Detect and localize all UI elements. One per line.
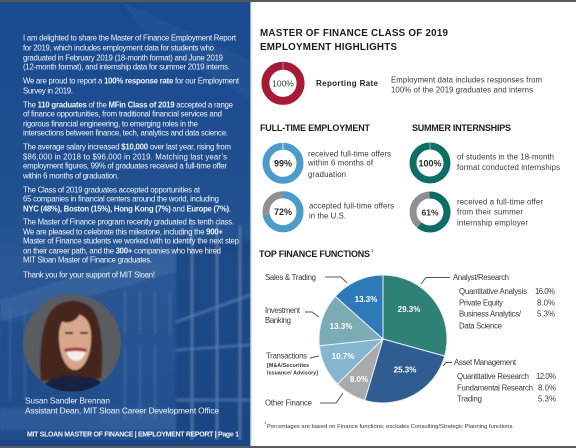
text block: letter paragraphs: graduated in February 2019 (18-month format) and June 2019 [23,53,223,62]
label: Analyst/Research breakdown: 8.0% [537,299,555,308]
title: EMPLOYMENT HIGHLIGHTS [260,42,397,53]
text block: footer: MIT SLOAN MASTER OF FINANCE | EMPLOYMENT REPORT | Page 1 [27,432,239,438]
text block: letter paragraphs: intersections between finance, tech, analytics and data science. [23,129,228,138]
leader lines: pie callouts [305,277,452,403]
icon: 99% donut [266,143,300,180]
text block: reporting rate description: 100% of the 2019 graduates and interns [391,86,533,95]
text block: letter paragraphs: Thank you for your support of MIT Sloan! [23,271,155,280]
text block: letter paragraphs [22,34,240,280]
icon: 61% donut [413,195,447,229]
text block: 100% description [457,153,560,172]
title [260,28,449,53]
heading: full-time employment: FULL-TIME EMPLOYMENT [260,123,370,133]
icon: reporting rate donut [265,62,301,101]
footnote [264,420,514,430]
text block: letter paragraphs: $86,000 in 2018 to $96,000 in 2019. Matching last year’s [23,153,227,162]
text block: signature: Assistant Dean, MIT Sloan Career Development Office [25,406,219,416]
label: Asset Management breakdown: 8.0% [538,384,556,393]
label: Asset Management breakdown: Quantitative Research [457,372,529,381]
icon: portrait of Susan Sandler Brennan [23,294,121,392]
label: Analyst/Research breakdown: Quantitative Analysis [459,287,527,296]
text block: letter paragraphs: We are pleased to celebrate this milestone, including the 900+ [23,227,223,236]
text block: 61% description: internship employer [457,219,528,228]
text block: letter paragraphs: MIT Sloan Master of Finance graduates. [23,256,152,265]
text block: 61% description [457,198,543,228]
panel: blue letter sidebar [0,0,250,448]
text block: 99% description: received full-time offers [308,149,391,158]
text block: 72% description: accepted full-time offers [309,202,394,211]
text block: letter paragraphs: NYC (48%), Boston (15%), Hong Kong (7%) and Europe (7%). [23,205,231,214]
label: Asset Management breakdown: Trading [457,395,482,404]
icon: reporting rate donut: 100% [272,78,294,88]
label: Sales & Trading: Sales & Trading [265,273,316,282]
icon: 100% donut: 100% [418,158,442,168]
chart labels: pie percentages: 29.3% [398,305,420,314]
text block: 72% description [309,202,394,221]
heading: summer internships: SUMMER INTERNSHIPS [412,123,511,133]
label: Asset Management breakdown: 5.3% [538,395,556,404]
label: Transactions: Issuance/ Advisory] [267,370,318,376]
label: Asset Management breakdown: 12.0% [536,372,556,381]
icon: 72% donut: 72% [274,207,292,217]
label: Asset Management breakdown: Asset Management [454,358,517,367]
label: Analyst/Research breakdown: 16.0% [535,287,555,296]
label: Investment Banking: Investment [265,306,301,315]
title: MASTER OF FINANCE CLASS OF 2019 [260,28,449,39]
label: Analyst/Research breakdown: Analyst/Research [453,273,509,282]
text block: letter paragraphs: The Class of 2019 graduates accepted opportunities at [23,186,201,195]
label: Other Finance: Other Finance [265,399,312,408]
label: Analyst/Research breakdown: Business Analytics/ [459,310,522,319]
icon: 61% donut: 61% [421,207,439,217]
text block: reporting rate description: Employment data includes responses from [391,76,542,85]
text block: letter paragraphs: (12-month format), and internship data for summer 2019 interns. [23,63,230,72]
label: Transactions [266,352,318,376]
chart labels: pie percentages: 25.3% [394,366,416,374]
slice: Transactions [319,339,383,384]
text block: letter paragraphs: of finance opportunities, from traditional financial services and [23,110,222,119]
chart: finance functions pie [319,275,447,403]
text block: letter paragraphs: The average salary increased $10,000 over last year, rising from [23,143,231,152]
label: Asset Management breakdown [454,358,556,404]
text block: letter paragraphs: rigorous financial engineering, to emerging roles in the [23,120,198,129]
text block: 61% description: received a full-time offer [457,198,543,207]
text block: reporting rate description [391,76,542,95]
icon: 72% donut [266,195,300,229]
label: Investment Banking [265,306,301,325]
label: Analyst/Research breakdown [453,273,555,331]
label: Asset Management breakdown: Fundamental Research [457,384,533,393]
text block: letter paragraphs: The Master of Finance program recently graduated its tenth class. [23,218,234,227]
text block: letter paragraphs: for 2019, which includes employment data for students who [23,44,215,53]
text block: 99% description [307,149,391,179]
label: Investment Banking: Banking [265,316,291,325]
text block: 100% description: of students in the 18-month [457,153,554,162]
text block: 100% description: format conducted internships [457,163,560,172]
text block: 99% description: graduation [308,170,346,179]
icon: 100% donut [413,142,447,180]
text block: letter paragraphs: 65 companies in financial centers around the world, including [23,195,219,204]
text block: 99% description: within 6 months of [307,159,374,168]
slice: Other Finance [338,339,383,400]
text block: letter paragraphs: Survey in 2019. [23,86,73,95]
label: Analyst/Research breakdown: 5.3% [537,310,555,319]
chart labels: pie percentages: 13.3% [355,295,377,304]
text block: letter paragraphs: employment figures, 99% of graduates received a full-time offer [23,162,227,171]
heading: reporting rate: Reporting Rate [316,79,379,88]
heading: top finance functions: TOP FINANCE FUNCTIONS [259,249,370,259]
text block: letter paragraphs: The 110 graduates of the MFin Class of 2019 accepted a range [23,101,233,110]
chart labels: pie percentages [330,295,420,384]
label: Transactions: [M&A/Securities [267,363,309,369]
text block: 72% description: in the U.S. [309,212,346,221]
icon: 99% donut: 99% [274,159,292,169]
chart labels: pie percentages: 13.3% [330,322,352,331]
label: Analyst/Research breakdown: Private Equity [459,299,503,308]
slice: Investment Banking [319,296,383,346]
slice: Sales & Trading [335,275,383,339]
chart labels: pie percentages: 8.0% [350,375,368,384]
text block: signature [25,396,219,416]
text block: letter paragraphs: I am delighted to share the Master of Finance Employment Report [23,34,237,43]
slice: Analyst/Research [383,275,447,356]
label: Analyst/Research breakdown: Data Science [459,322,502,331]
text block: letter paragraphs: We are proud to report a 100% response rate for our Employment [23,77,240,86]
text block: letter paragraphs: on their career path, and the 300+ companies who have hired [23,247,221,256]
slice: Asset Management [365,339,445,403]
text block: letter paragraphs: within 6 months of graduation. [22,172,119,181]
text block: letter paragraphs: Master of Finance students we worked with to identify the next step [23,237,240,246]
text block: 61% description: from their summer [457,208,523,217]
footnote: Percentages are based on Finance functions; excludes Consulting/Strategic Planning functions. [267,424,514,430]
chart labels: pie percentages: 10.7% [332,352,354,361]
text block: signature: Susan Sandler Brennan [25,396,110,406]
footnote: 1 [264,420,267,425]
heading: top finance functions: 1 [371,248,374,253]
building photo backdrop [0,0,250,448]
label: Transactions: Transactions [266,352,307,361]
